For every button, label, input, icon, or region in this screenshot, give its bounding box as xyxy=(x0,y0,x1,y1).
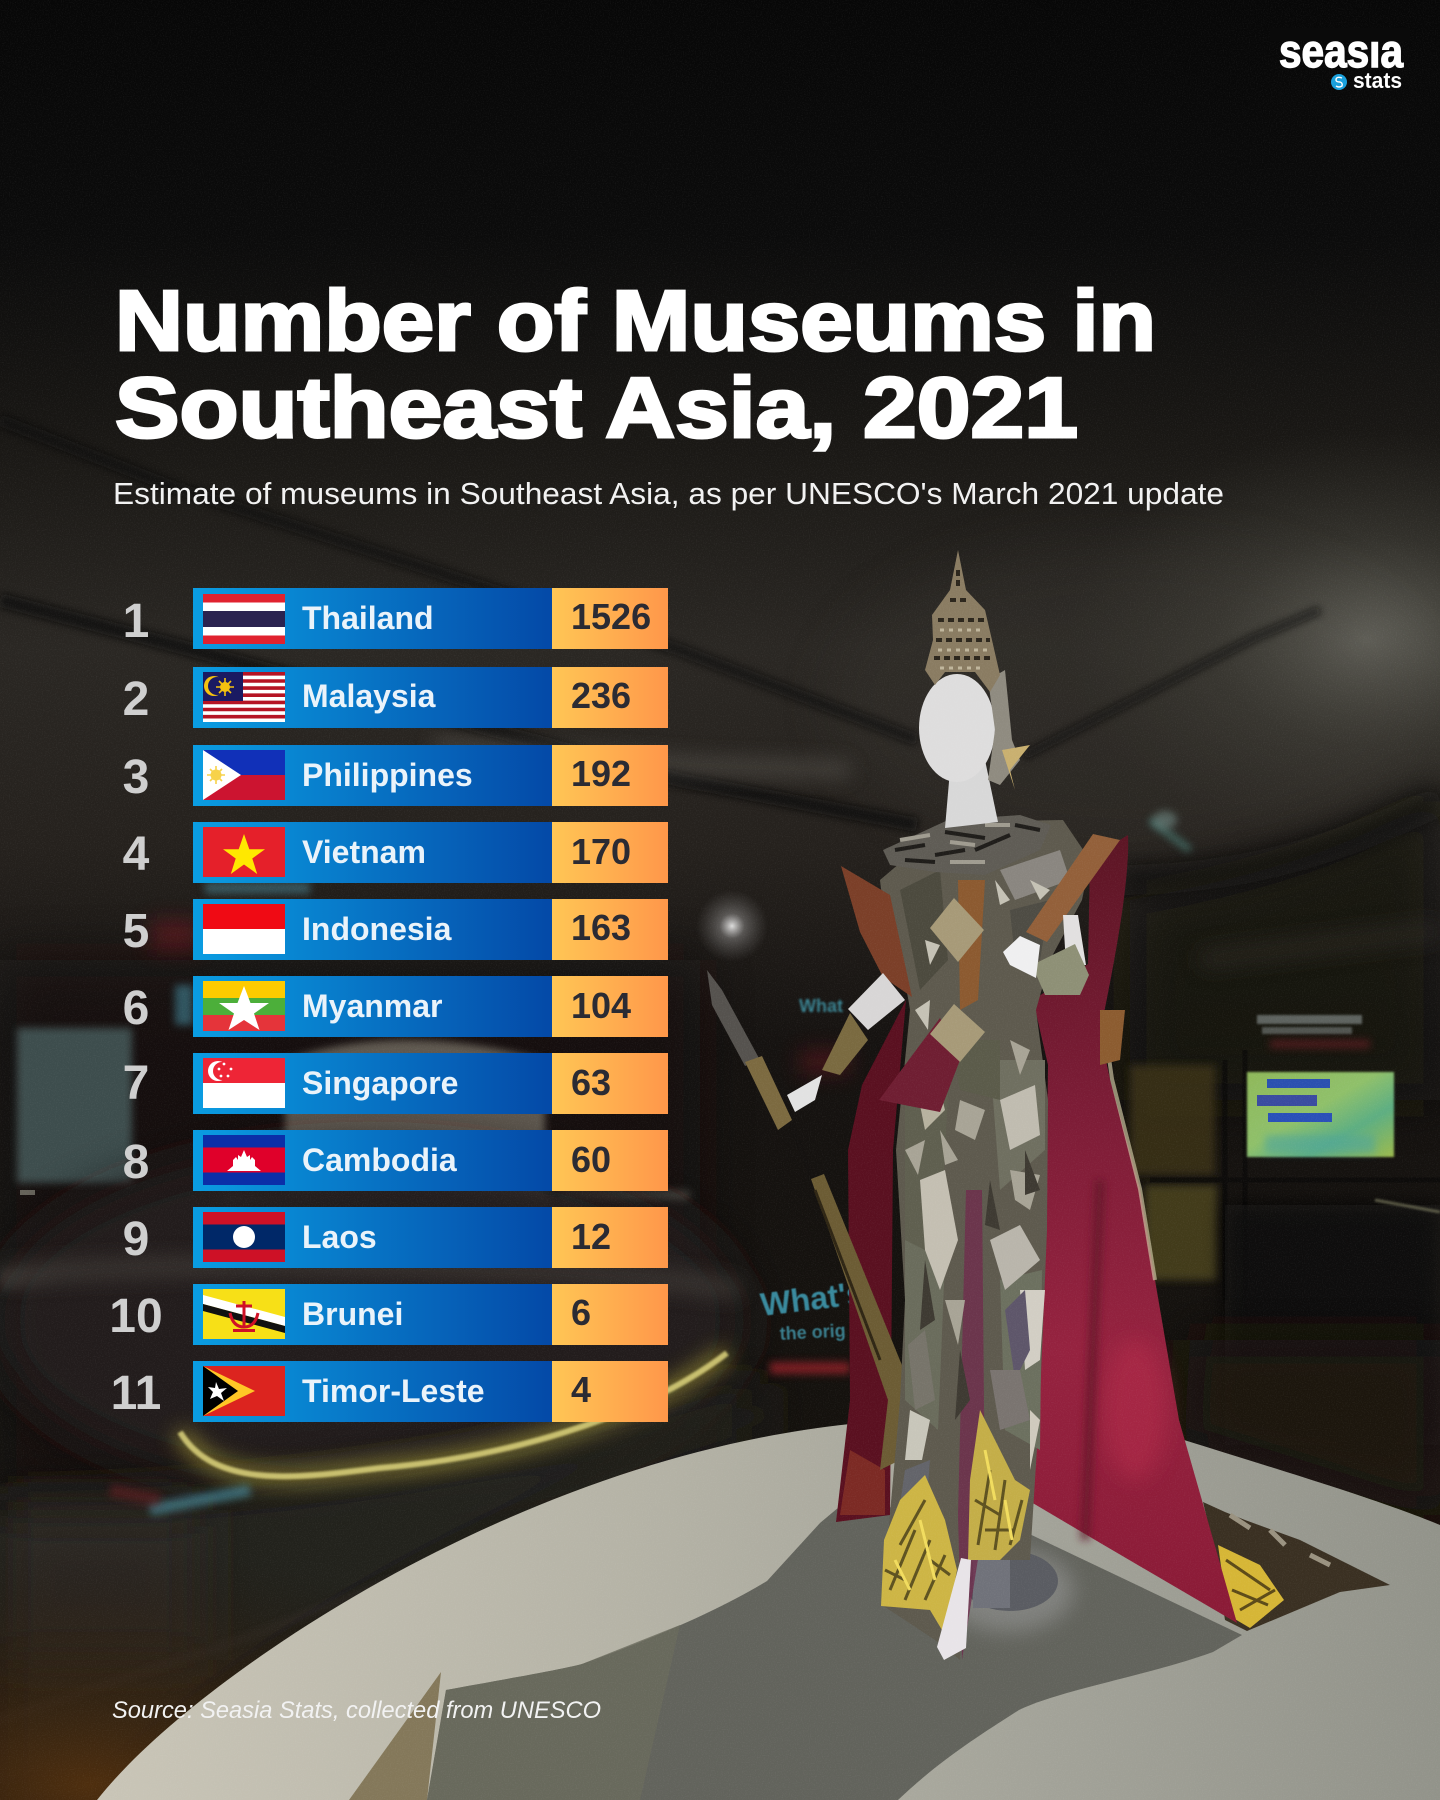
cape, left side xyxy=(836,1000,906,1522)
row 4: Vietnam: Vietnam xyxy=(302,834,426,870)
subtitle: Estimate of museums in Southeast Asia, as per UNESCO's March 2021 update xyxy=(113,476,1224,511)
row 4: Vietnam: 4 xyxy=(123,828,150,881)
row 8: Cambodia xyxy=(123,1130,668,1191)
row 5: Indonesia xyxy=(123,899,668,960)
row 11: Timor-Leste: 4 xyxy=(571,1369,591,1410)
pendants xyxy=(930,898,985,1062)
logo: seasia stats: stats xyxy=(1353,68,1402,93)
wall panels and stone block xyxy=(0,1028,690,1310)
row 2: Malaysia xyxy=(123,667,668,728)
row 2: Malaysia: 236 xyxy=(571,675,631,716)
row 5: Indonesia: 5 xyxy=(123,905,149,958)
row 7: Singapore: 7 xyxy=(123,1057,149,1110)
flag: Brunei xyxy=(203,1289,285,1339)
row 3: Philippines xyxy=(123,745,668,806)
figure stand xyxy=(942,1548,1074,1632)
sword and knife xyxy=(707,970,908,1470)
flag: Malaysia xyxy=(203,672,285,722)
row 10: Brunei xyxy=(109,1284,668,1345)
flag: Indonesia xyxy=(203,904,285,954)
crown xyxy=(925,550,1000,692)
logo: seasia stats xyxy=(1270,25,1410,93)
row 1: Thailand: 1526 xyxy=(571,596,651,637)
row 3: Philippines: Philippines xyxy=(302,757,473,793)
row 4: Vietnam: 170 xyxy=(571,831,631,872)
gown with camouflage pattern xyxy=(880,820,1090,1660)
row 2: Malaysia: 2 xyxy=(123,673,149,726)
maroon pleats xyxy=(879,1018,960,1112)
head and neck xyxy=(919,670,1030,828)
row 3: Philippines: 3 xyxy=(123,751,149,804)
row 6: Myanmar: 104 xyxy=(571,985,631,1026)
title: Number of Museums in xyxy=(115,274,1156,369)
title: Southeast Asia, 2021 xyxy=(115,361,1078,456)
row 7: Singapore: Singapore xyxy=(302,1065,458,1101)
flag: Laos xyxy=(203,1212,285,1262)
white foot xyxy=(937,1558,971,1660)
train of the cape xyxy=(1203,1502,1390,1631)
row 8: Cambodia: 8 xyxy=(123,1136,149,1189)
left arm and dagger hand xyxy=(787,973,905,1112)
row 9: Laos xyxy=(123,1207,668,1268)
right arm and hand xyxy=(1003,915,1089,995)
row 11: Timor-Leste: Timor-Leste xyxy=(302,1373,485,1409)
row 9: Laos: 9 xyxy=(123,1213,149,1266)
gold panels xyxy=(1130,1050,1440,1520)
flag: Philippines xyxy=(203,750,285,800)
display ring with yellow arc xyxy=(0,1145,760,1800)
row 5: Indonesia: Indonesia xyxy=(302,911,452,947)
row 8: Cambodia: Cambodia xyxy=(302,1142,457,1178)
flag: Timor-Leste xyxy=(203,1366,285,1416)
row 4: Vietnam xyxy=(123,822,668,883)
glowing wall signs: What xyxy=(799,996,843,1016)
row 5: Indonesia: 163 xyxy=(571,907,631,948)
row 1: Thailand: Thailand xyxy=(302,600,434,636)
costumed mannequin xyxy=(707,550,1390,1660)
flag: Singapore xyxy=(203,1058,285,1108)
ranking table xyxy=(109,588,668,1422)
row 9: Laos: Laos xyxy=(302,1219,377,1255)
row 7: Singapore xyxy=(123,1053,668,1114)
glowing wall signs: the orig xyxy=(779,1321,846,1344)
embroidered gold hems xyxy=(881,1410,1030,1635)
flag: Myanmar xyxy=(203,981,285,1031)
collar xyxy=(883,815,1051,875)
row 6: Myanmar: 6 xyxy=(123,982,149,1035)
row 8: Cambodia: 60 xyxy=(571,1139,611,1180)
row 10: Brunei: 6 xyxy=(571,1292,591,1333)
row 6: Myanmar: Myanmar xyxy=(302,988,442,1024)
title xyxy=(115,274,1156,456)
row 9: Laos: 12 xyxy=(571,1216,611,1257)
row 10: Brunei: 10 xyxy=(109,1290,163,1343)
row 10: Brunei: Brunei xyxy=(302,1296,403,1332)
glowing wall signs xyxy=(150,882,1370,1374)
row 11: Timor-Leste xyxy=(111,1361,668,1422)
flag: Cambodia xyxy=(203,1135,285,1185)
row 11: Timor-Leste: 11 xyxy=(111,1367,161,1420)
icon: logo dot xyxy=(1331,74,1347,90)
logo: seasia stats: seasia xyxy=(1279,25,1403,77)
flag: Vietnam xyxy=(203,827,285,877)
row 3: Philippines: 192 xyxy=(571,753,631,794)
source note: Source: Seasia Stats, collected from UNESCO xyxy=(112,1697,601,1724)
flag: Thailand xyxy=(203,594,285,644)
sashes xyxy=(841,834,1120,1010)
glowing wall signs: What's xyxy=(758,1275,866,1323)
row 2: Malaysia: Malaysia xyxy=(302,678,436,714)
monitor screen xyxy=(1247,1072,1394,1157)
row 7: Singapore: 63 xyxy=(571,1062,611,1103)
cape, right side xyxy=(1031,835,1237,1623)
row 1: Thailand: 1 xyxy=(123,595,149,648)
row 1: Thailand xyxy=(123,588,668,649)
row 6: Myanmar xyxy=(123,976,668,1037)
platform with cast shadow xyxy=(97,1424,1440,1800)
